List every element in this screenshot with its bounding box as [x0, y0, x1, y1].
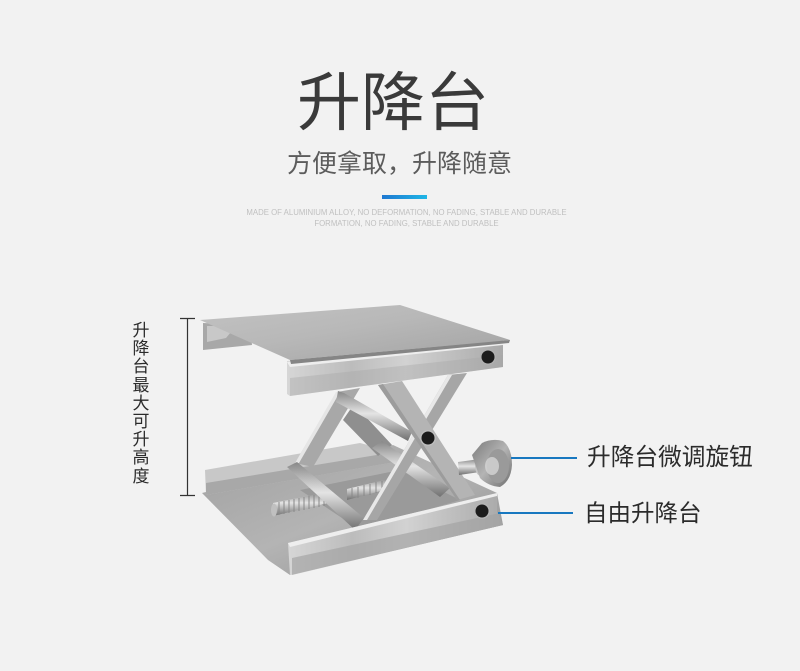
- accent bar: [382, 195, 427, 199]
- callout label: knob: 升降台微调旋钮: [587, 445, 753, 471]
- rear scissor arms: [295, 388, 392, 467]
- english description: MADE OF ALUMINIUM ALLOY, NO DEFORMATION, NO FADING, STABLE AND DURABLE: [246, 208, 567, 217]
- front base flange: [288, 493, 503, 575]
- height bracket: [180, 318, 195, 496]
- top plate: [200, 305, 510, 396]
- rear cross rod: [336, 391, 412, 441]
- adjustment knob: [458, 440, 512, 487]
- threaded rod: [271, 478, 392, 516]
- pivot bolt: [420, 430, 436, 446]
- front lower rod: [287, 462, 364, 530]
- callout line: platform: [498, 512, 573, 514]
- rear lower rod: [372, 441, 450, 497]
- callout line: knob: [511, 457, 577, 459]
- front scissor arms: [363, 373, 475, 520]
- english description: [246, 208, 567, 228]
- english description: FORMATION, NO FADING, STABLE AND DURABLE: [314, 219, 499, 228]
- title: 升降台: [297, 67, 489, 139]
- vertical height label: 升降台最大可升高度: [132, 321, 150, 486]
- base plate: [202, 443, 503, 575]
- subtitle: 方便拿取，升降随意: [287, 150, 512, 178]
- callout label: platform: 自由升降台: [584, 500, 702, 526]
